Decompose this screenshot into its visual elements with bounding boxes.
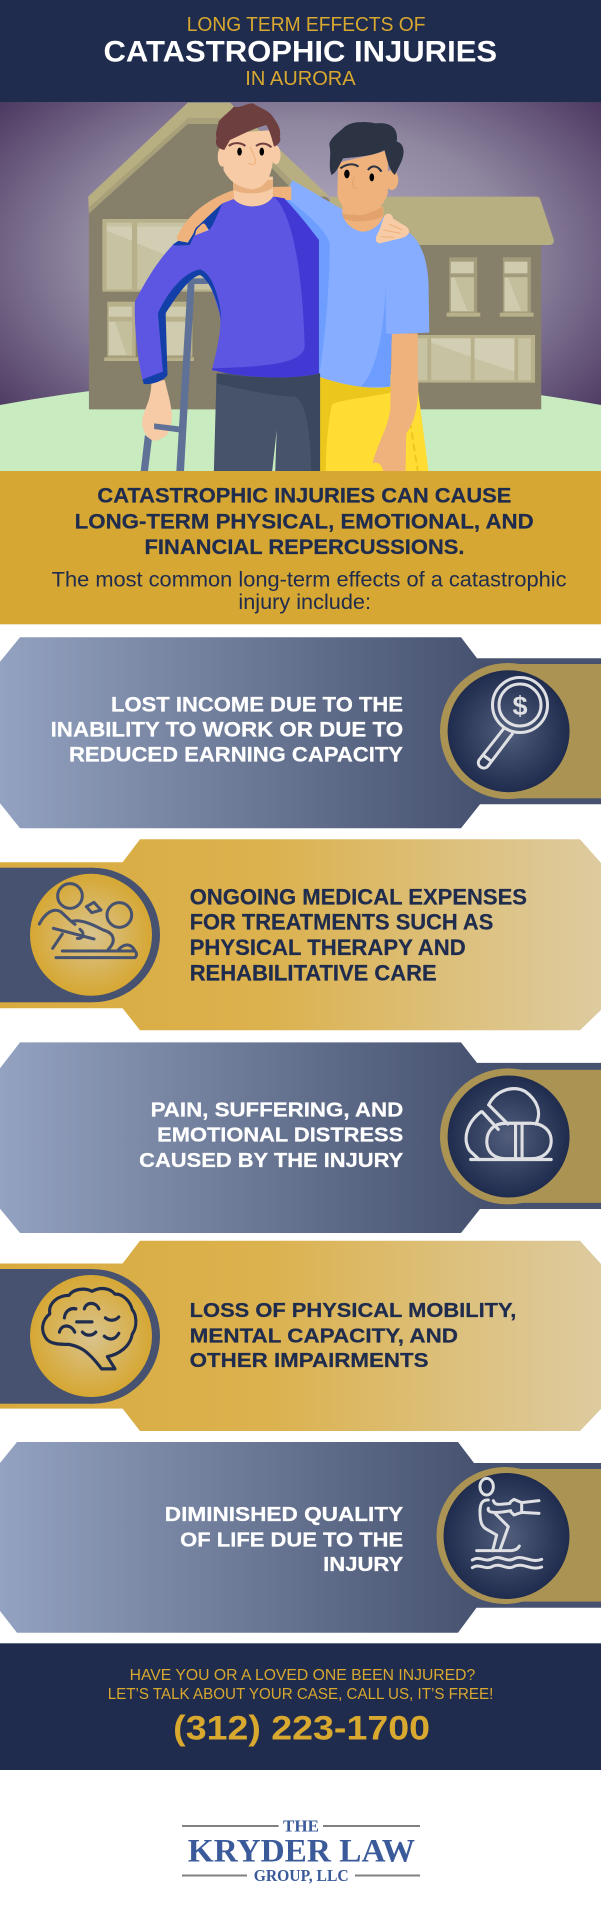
- text: lost income: REDUCED EARNING CAPACITY: [69, 744, 403, 767]
- text: lost income: INABILITY TO WORK OR DUE TO: [51, 719, 403, 742]
- title header: [0, 0, 601, 102]
- gold intro banner: [0, 471, 601, 624]
- gold intro banner: FINANCIAL REPERCUSSIONS.: [144, 535, 464, 559]
- illustration: two friends in front of a house: [0, 102, 601, 472]
- title header: IN AURORA: [245, 67, 356, 90]
- hand on shoulder: [376, 214, 409, 243]
- title header: CATASTROPHIC INJURIES: [104, 36, 497, 68]
- text: loss of mobility: LOSS OF PHYSICAL MOBILITY,: [190, 1300, 516, 1322]
- text: lost income: [51, 694, 403, 767]
- icon: pills: [466, 1089, 551, 1160]
- footer call to action: [0, 1643, 601, 1770]
- gold intro banner: CATASTROPHIC INJURIES CAN CAUSE: [97, 484, 511, 508]
- friend on right: light blue t-shirt and yellow shorts: [284, 122, 429, 471]
- gold intro banner: The most common long-term effects of a catastrophic: [52, 568, 566, 591]
- logo: The Kryder Law Group, LLC: GROUP, LLC: [254, 1866, 349, 1885]
- text: pain and suffering: EMOTIONAL DISTRESS: [157, 1124, 403, 1146]
- panel: quality of life: [0, 1442, 601, 1633]
- title header: LONG TERM EFFECTS OF: [187, 13, 426, 36]
- icon: magnifying glass with dollar: $: [512, 691, 528, 721]
- footer call to action: HAVE YOU OR A LOVED ONE BEEN INJURED?: [130, 1667, 476, 1684]
- footer call to action: (312) 223-1700: [173, 1709, 430, 1747]
- icon: physical therapy: [39, 884, 137, 958]
- text: medical expenses: REHABILITATIVE CARE: [190, 961, 437, 986]
- icon: water skier: [472, 1478, 542, 1568]
- text: quality of life: OF LIFE DUE TO THE: [180, 1530, 403, 1552]
- panel: medical expenses: [0, 839, 601, 1030]
- panel: pain and suffering: [0, 1042, 601, 1233]
- text: pain and suffering: [139, 1100, 404, 1172]
- text: quality of life: DIMINISHED QUALITY: [165, 1504, 404, 1526]
- logo: The Kryder Law Group, LLC: [182, 1817, 420, 1885]
- crutch: [141, 278, 208, 471]
- gold intro banner: injury include:: [238, 591, 371, 614]
- icon: magnifying glass with dollar: [478, 678, 548, 768]
- text: quality of life: [165, 1504, 404, 1576]
- footer call to action: LET’S TALK ABOUT YOUR CASE, CALL US, IT’S FREE!: [108, 1686, 493, 1703]
- text: medical expenses: PHYSICAL THERAPY AND: [190, 935, 466, 960]
- arm around shoulders: [176, 187, 291, 243]
- logo: The Kryder Law Group, LLC: THE: [283, 1817, 319, 1836]
- icon: brain: [43, 1289, 136, 1369]
- text: lost income: LOST INCOME DUE TO THE: [111, 694, 403, 717]
- text: medical expenses: [190, 884, 527, 986]
- text: medical expenses: FOR TREATMENTS SUCH AS: [190, 909, 493, 934]
- text: pain and suffering: PAIN, SUFFERING, AND: [151, 1100, 403, 1122]
- house: [88, 103, 554, 409]
- panel: loss of mobility: [0, 1241, 601, 1431]
- text: medical expenses: ONGOING MEDICAL EXPENSES: [190, 884, 527, 909]
- text: quality of life: INJURY: [323, 1554, 404, 1576]
- text: loss of mobility: OTHER IMPAIRMENTS: [190, 1350, 428, 1372]
- friend on left: purple sweater and slate trousers: [135, 103, 320, 471]
- text: loss of mobility: [190, 1300, 516, 1372]
- logo: The Kryder Law Group, LLC: KRYDER LAW: [188, 1834, 415, 1870]
- panel: lost income: [0, 637, 601, 828]
- gold intro banner: LONG-TERM PHYSICAL, EMOTIONAL, AND: [75, 510, 534, 534]
- text: pain and suffering: CAUSED BY THE INJURY: [139, 1150, 404, 1172]
- text: loss of mobility: MENTAL CAPACITY, AND: [190, 1325, 458, 1347]
- lawn: [0, 377, 601, 471]
